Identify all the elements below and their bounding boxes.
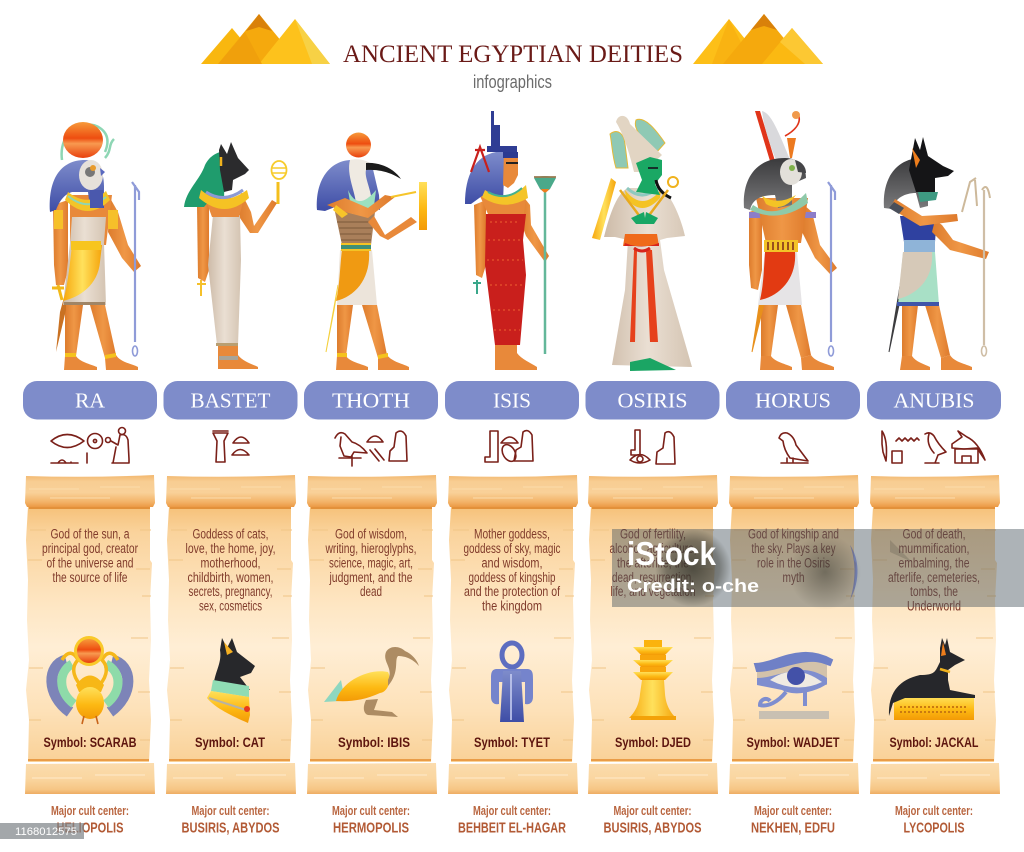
column: Thoth [304, 132, 438, 836]
symbol label: Bastet: Symbol: CAT [195, 734, 265, 750]
column: Isis [445, 111, 579, 836]
description: Isis: the kingdom [482, 599, 542, 614]
column: Horus [726, 111, 860, 836]
cult center: Ra: HELIOPOLIS [56, 820, 124, 836]
scroll panel: Bastet [166, 475, 296, 794]
symbol label: Osiris: Symbol: DJED [615, 734, 691, 750]
symbol icon: ibis [324, 647, 419, 717]
watermark logo: iStock [627, 535, 717, 572]
hieroglyphs: Thoth [335, 431, 407, 466]
symbol icon: wadjet [755, 653, 832, 719]
name pill: BASTET: BASTET [190, 388, 271, 412]
description: Anubis: embalming, the [898, 555, 970, 570]
figure: Ra [50, 122, 141, 370]
figure: Horus [744, 111, 837, 370]
description: Isis: and the protection of [464, 584, 560, 599]
name pill: ISIS [445, 381, 579, 420]
description: Osiris: alcohol, agriculture, [610, 541, 696, 556]
hieroglyphs: Osiris [630, 430, 675, 464]
description: Thoth: judgment, and the [329, 570, 412, 585]
cult center: Isis: Major cult center: [473, 804, 551, 818]
name pill: THOTH [304, 381, 438, 420]
cult center: Osiris: Major cult center: [614, 804, 692, 818]
description: Bastet: love, the home, joy, [186, 541, 276, 556]
description: Anubis [888, 526, 980, 614]
cult center: Osiris: BUSIRIS, ABYDOS [604, 820, 702, 836]
name pill: HORUS: HORUS [755, 388, 831, 412]
column: Bastet [164, 142, 298, 836]
symbol icon: jackal [889, 638, 975, 720]
column: Anubis [867, 137, 1001, 836]
description: Thoth: writing, hieroglyphs, [325, 541, 416, 556]
image id tag: 1168012575 [15, 826, 77, 838]
description: Osiris [610, 526, 696, 599]
symbol icon: scarab [52, 636, 128, 724]
scroll panel: Osiris [588, 475, 718, 794]
cult center: Anubis: Major cult center: [895, 804, 973, 818]
description: Ra: principal god, creator [42, 541, 138, 556]
symbol icon: tyet [491, 643, 533, 722]
cult center: Horus: NEKHEN, EDFU [751, 820, 835, 836]
name pill: OSIRIS [586, 381, 720, 420]
figure: Bastet [184, 142, 286, 369]
symbol icon: djed [629, 640, 676, 720]
description: Thoth: science, magic, art, [329, 555, 413, 570]
description: Horus: the sky. Plays a key [752, 541, 836, 556]
description: Bastet [186, 526, 276, 614]
cult center: Thoth [332, 804, 410, 836]
figure: Anubis [884, 137, 990, 370]
description: Isis: and wisdom, [482, 555, 542, 570]
name pill: HORUS [726, 381, 860, 420]
description: Bastet: secrets, pregnancy, [188, 584, 272, 599]
description: Ra: the source of life [52, 570, 128, 585]
pyramids left [201, 14, 330, 64]
description: Anubis: tombs, the [910, 584, 958, 599]
subtitle: infographics [473, 72, 552, 92]
scroll panel: Anubis [870, 475, 1000, 794]
cult center: Bastet: BUSIRIS, ABYDOS [182, 820, 280, 836]
watermark credit: Credit: o-che [627, 576, 759, 596]
scroll panel: Isis [448, 475, 578, 794]
cult center: Horus: Major cult center: [754, 804, 832, 818]
cult center: Ra: Major cult center: [51, 804, 129, 818]
cult center: Anubis: LYCOPOLIS [904, 820, 964, 836]
description: Ra: of the universe and [46, 555, 134, 570]
cult center: Isis [458, 804, 566, 836]
scroll panel: Thoth [307, 475, 437, 794]
symbol label: Horus: Symbol: WADJET [746, 734, 840, 750]
pyramids right [693, 14, 823, 64]
figure: Isis [465, 111, 556, 370]
description: Osiris: the afterlife, the [617, 555, 689, 570]
description: Osiris: God of fertility, [620, 526, 686, 542]
description: Thoth: dead [360, 584, 382, 599]
name pill: THOTH: THOTH [332, 388, 410, 412]
description: Isis [464, 526, 561, 614]
cult center: Thoth: HERMOPOLIS [333, 820, 409, 836]
symbol label: Isis: Symbol: TYET [474, 734, 550, 750]
description: Anubis: mummification, [898, 541, 970, 556]
description: Thoth [325, 526, 416, 599]
hieroglyphs: Anubis [882, 431, 985, 463]
description: Bastet: sex, cosmetics [199, 599, 262, 614]
symbol label: Anubis: Symbol: JACKAL [890, 734, 979, 750]
name pill: OSIRIS: OSIRIS [618, 388, 688, 412]
description: Isis: Mother goddess, [474, 526, 550, 542]
description: Horus: God of kingship and [748, 526, 839, 542]
cult center: Bastet: Major cult center: [192, 804, 270, 818]
description: Osiris: life, and vegetation [610, 584, 696, 599]
symbol label: Thoth: Symbol: IBIS [338, 734, 410, 750]
cult center: Horus [751, 804, 835, 836]
cult center: Isis: BEHBEIT EL-HAGAR [458, 820, 566, 836]
hieroglyphs: Bastet [213, 431, 249, 462]
description: Horus [748, 526, 839, 585]
name pill: ANUBIS: ANUBIS [894, 388, 974, 412]
name pill: BASTET [164, 381, 298, 420]
description: Bastet: childbirth, women, [188, 570, 274, 585]
column: Osiris [586, 116, 720, 837]
description: Ra [42, 526, 138, 585]
description: Anubis: afterlife, cemeteries, [888, 570, 980, 585]
symbol icon: cat [207, 638, 255, 723]
name pill: RA: RA [75, 388, 106, 412]
description: Bastet: Goddess of cats, [192, 526, 268, 542]
name pill: ANUBIS [867, 381, 1001, 420]
name pill: ISIS: ISIS [493, 388, 531, 412]
image id tag [0, 823, 84, 839]
title: ANCIENT EGYPTIAN DEITIES [343, 39, 683, 68]
hieroglyphs: Isis [485, 431, 533, 464]
description: Horus: myth [782, 570, 804, 585]
description: Ra: God of the sun, a [50, 526, 130, 542]
scroll panel: Horus [729, 475, 859, 794]
description: Bastet: motherhood, [200, 555, 260, 570]
hieroglyphs: Ra [51, 428, 129, 463]
column: Ra [23, 122, 157, 836]
description: Anubis: Underworld [907, 599, 961, 614]
figure: Thoth [317, 132, 427, 370]
description: Osiris: dead, resurrection, [612, 570, 694, 585]
description: Anubis: God of death, [902, 526, 966, 542]
watermark band [612, 529, 1024, 610]
cult center: Anubis [895, 804, 973, 836]
description: Horus: role in the Osiris [757, 555, 830, 570]
description: Isis: goddess of kingship [468, 570, 556, 585]
description: Thoth: God of wisdom, [335, 526, 407, 542]
symbol label: Ra: Symbol: SCARAB [44, 734, 136, 750]
cult center: Ra [51, 804, 129, 836]
cult center: Osiris [604, 804, 702, 836]
cult center: Thoth: Major cult center: [332, 804, 410, 818]
figure: Osiris [592, 116, 692, 371]
name pill: RA [23, 381, 157, 420]
scroll panel: Ra [25, 475, 155, 794]
hieroglyphs: Horus [779, 433, 808, 463]
description: Isis: goddess of sky, magic [464, 541, 561, 556]
cult center: Bastet [182, 804, 280, 836]
